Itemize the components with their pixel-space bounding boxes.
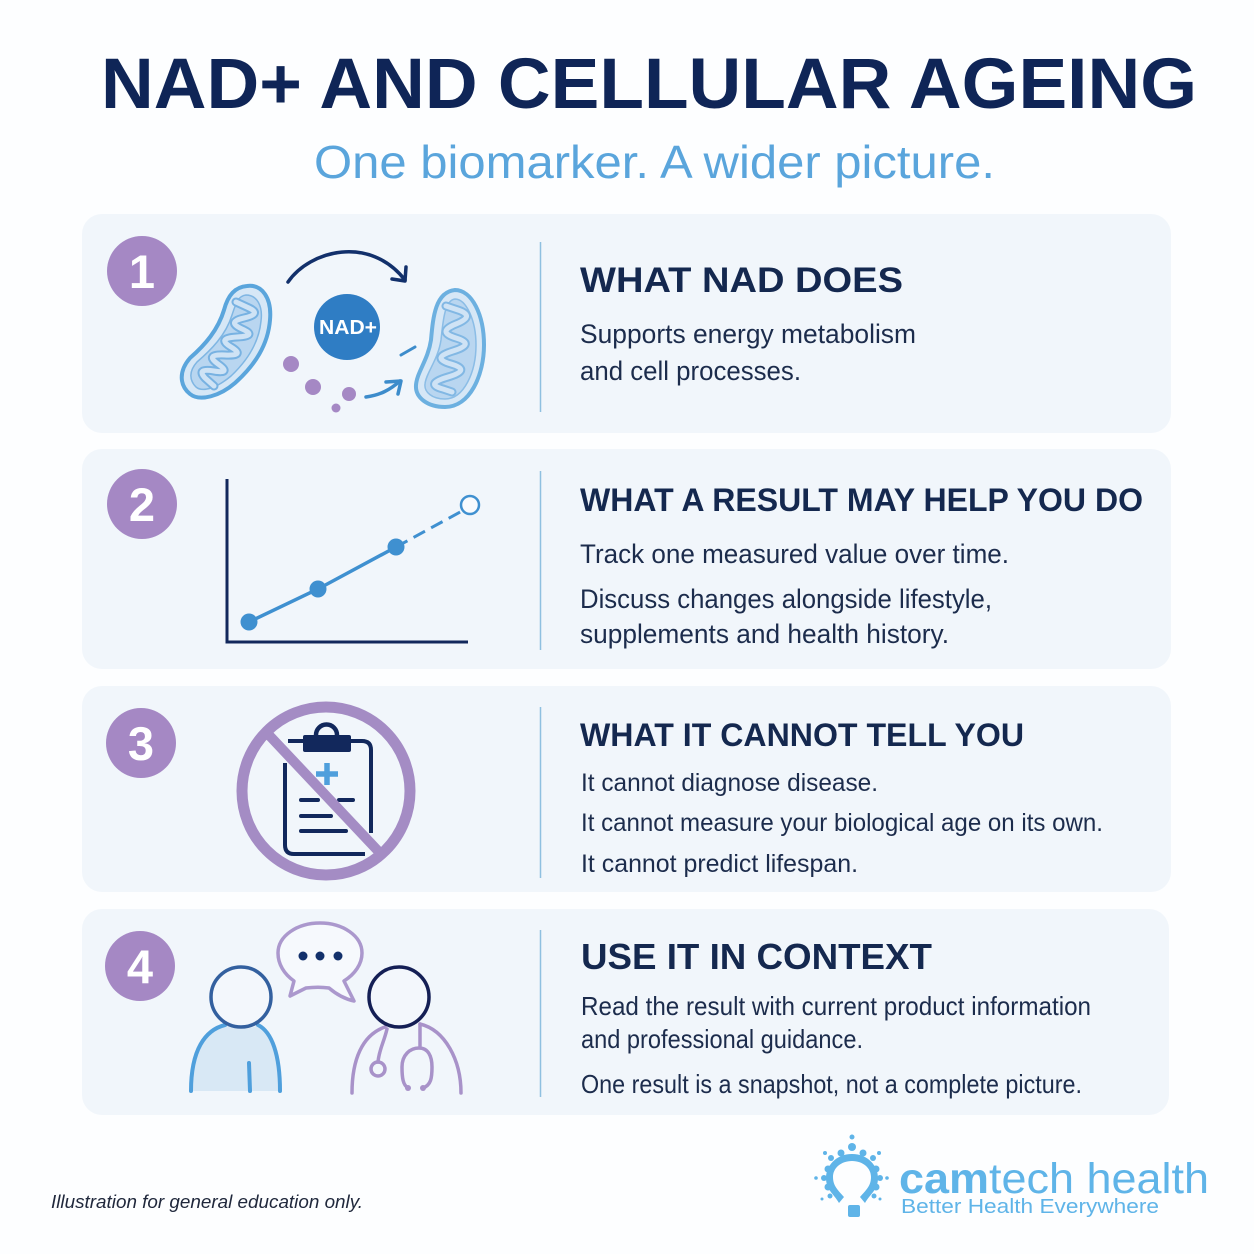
body text: Discuss changes alongside lifestyle, bbox=[580, 584, 992, 614]
body text: It cannot measure your biological age on its own. bbox=[581, 809, 1103, 837]
step badge 2 bbox=[107, 469, 177, 539]
panel: what NAD does bbox=[82, 214, 1171, 433]
panel: use it in context bbox=[82, 909, 1169, 1115]
step badge 2: 2 bbox=[129, 478, 155, 531]
icon: lightbulb of dots bbox=[814, 1134, 889, 1217]
title: NAD+ AND CELLULAR AGEING bbox=[101, 45, 1197, 124]
step badge 3: 3 bbox=[128, 717, 154, 770]
panel: what it cannot tell you bbox=[82, 686, 1171, 892]
body text: Supports energy metabolism bbox=[580, 319, 916, 349]
step badge 4: 4 bbox=[127, 940, 153, 993]
body text: supplements and health history. bbox=[580, 619, 949, 649]
body text bbox=[580, 319, 916, 386]
icon: patient and doctor conversation bbox=[191, 923, 461, 1093]
heading: WHAT IT CANNOT TELL YOU bbox=[580, 717, 1024, 753]
footnote: Illustration for general education only. bbox=[51, 1192, 363, 1212]
body text: Track one measured value over time. bbox=[580, 539, 1009, 569]
body text: It cannot diagnose disease. bbox=[581, 769, 878, 797]
icon: mitochondria and NAD+: NAD+ bbox=[319, 317, 377, 339]
subtitle: One biomarker. A wider picture. bbox=[314, 136, 995, 188]
body text: One result is a snapshot, not a complete picture. bbox=[581, 1069, 1082, 1099]
step badge 4 bbox=[105, 931, 175, 1001]
tagline: Better Health Everywhere bbox=[901, 1196, 1159, 1218]
body text bbox=[581, 991, 1091, 1099]
body text: Read the result with current product information bbox=[581, 991, 1091, 1021]
icon: mitochondria and NAD+ bbox=[182, 252, 484, 412]
line chart bbox=[227, 479, 479, 642]
brand name: camtech health bbox=[899, 1155, 1209, 1203]
icon: prohibited clipboard bbox=[242, 707, 410, 875]
heading: WHAT NAD DOES bbox=[580, 261, 903, 300]
panel: what a result may help you do bbox=[82, 449, 1171, 669]
step badge 3 bbox=[106, 708, 176, 778]
logo: camtech health bbox=[814, 1134, 1209, 1218]
step badge 1: 1 bbox=[129, 245, 155, 298]
body text: and professional guidance. bbox=[581, 1024, 863, 1054]
body text: It cannot predict lifespan. bbox=[581, 850, 858, 878]
heading: USE IT IN CONTEXT bbox=[581, 936, 932, 977]
body text bbox=[581, 769, 1103, 878]
step badge 1 bbox=[107, 236, 177, 306]
body text: and cell processes. bbox=[580, 356, 801, 386]
body text bbox=[580, 539, 1009, 649]
heading: WHAT A RESULT MAY HELP YOU DO bbox=[580, 482, 1143, 518]
